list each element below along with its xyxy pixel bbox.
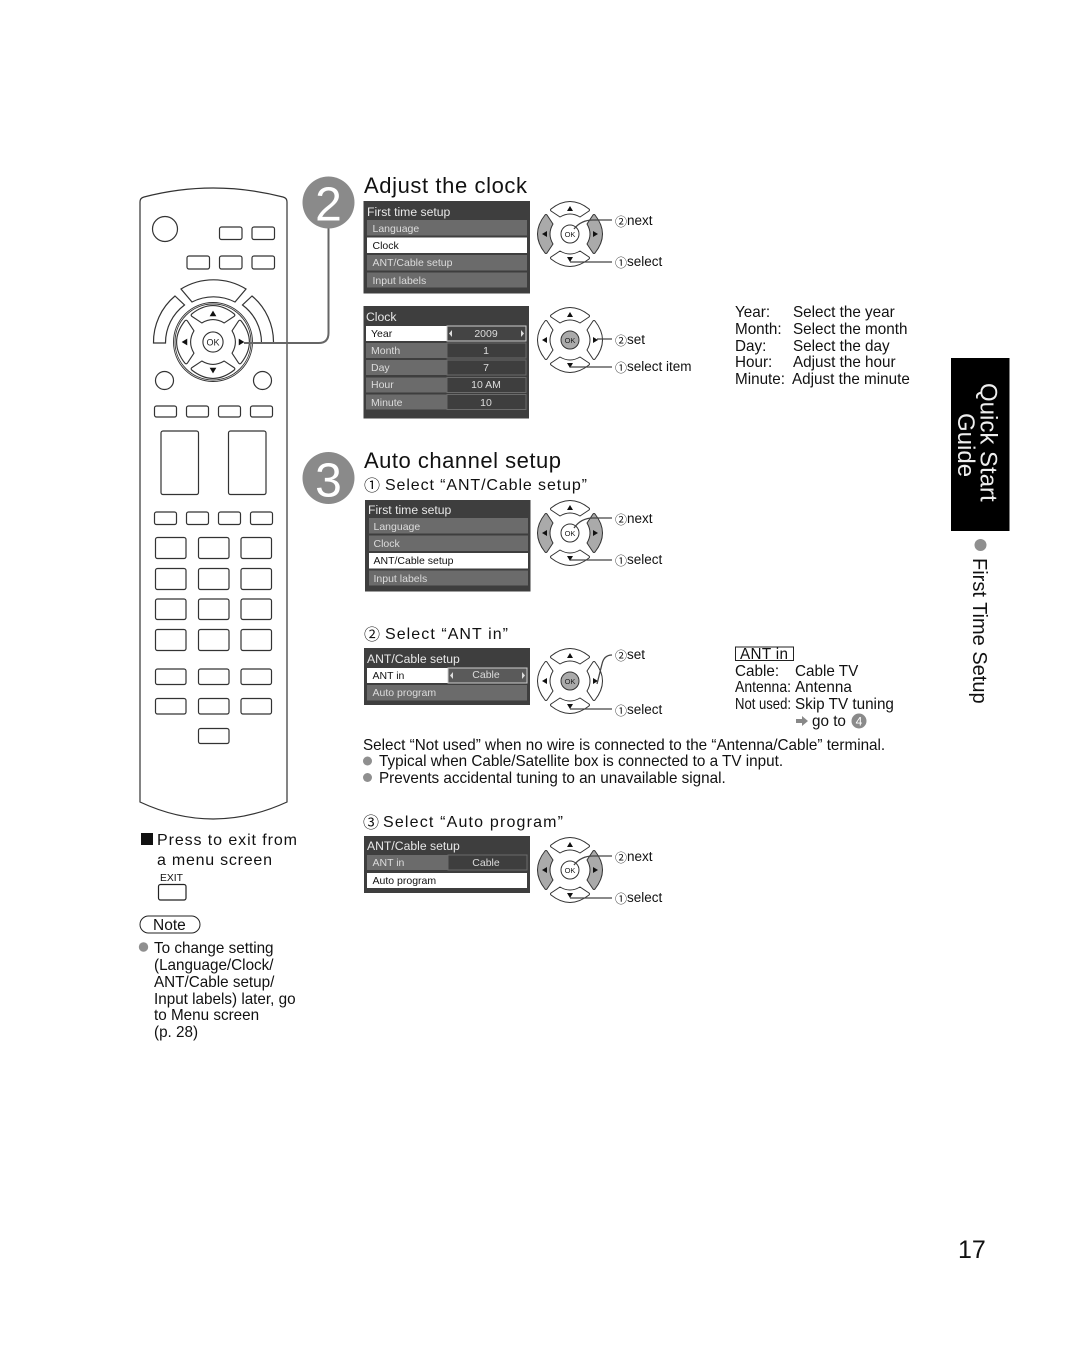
clock field descriptions: Select the year bbox=[793, 304, 895, 321]
menu: first time setup, clock selected: ANT/Cable setup bbox=[372, 257, 453, 269]
remote buttons: set / select item: ① bbox=[615, 359, 627, 376]
clock field descriptions: Select the month bbox=[793, 321, 907, 338]
menu: clock: Clock bbox=[366, 310, 397, 324]
remote control: OK bbox=[206, 338, 220, 348]
sub-heading: select ANT in: ② bbox=[364, 621, 380, 645]
remote buttons: next / select bbox=[538, 838, 663, 907]
menu: first time setup, clock selected: Input labels bbox=[372, 275, 426, 287]
note text: to Menu screen bbox=[154, 1007, 259, 1024]
ANT in options: Skip TV tuning bbox=[795, 696, 894, 713]
ANT in options: Antenna: bbox=[735, 679, 791, 696]
menu: first time setup, ANT/Cable selected: Input labels bbox=[374, 573, 427, 585]
remote buttons: set / select item: set bbox=[627, 332, 645, 347]
menu: clock: Day bbox=[371, 362, 390, 374]
clock field descriptions: Minute: bbox=[735, 371, 785, 388]
menu: first time setup, ANT/Cable selected bbox=[365, 500, 530, 592]
menu: auto program selected: Auto program bbox=[372, 875, 436, 887]
not used explanation: Select “Not used” when no wire is connected to the “Antenna/Cable” terminal. bbox=[363, 737, 885, 754]
menu: first time setup, clock selected: Clock bbox=[372, 240, 400, 252]
clock field descriptions: Select the day bbox=[793, 338, 890, 355]
sub-heading: select auto program: Select “Auto program” bbox=[383, 814, 563, 831]
ANT in options: Antenna bbox=[795, 679, 852, 696]
remote buttons: next / select: ② bbox=[615, 849, 627, 866]
remote buttons: set / select item: OK bbox=[565, 336, 575, 345]
remote buttons: set / select item bbox=[538, 308, 692, 376]
menu: ANT in selected: ANT in bbox=[372, 670, 405, 682]
remote buttons: next / select: next bbox=[627, 213, 653, 228]
remote buttons: next / select: ① bbox=[615, 890, 627, 907]
menu: clock: 7 bbox=[483, 362, 489, 374]
sub-heading: select ANT/Cable setup bbox=[364, 472, 587, 496]
remote buttons: set / select item: ② bbox=[615, 332, 627, 349]
menu: auto program selected bbox=[364, 836, 530, 893]
menu: auto program selected: Cable bbox=[472, 857, 500, 869]
note text bbox=[139, 940, 296, 1041]
icon: exit button: EXIT bbox=[160, 872, 184, 884]
clock field descriptions: Year: bbox=[735, 304, 770, 321]
note label: Note bbox=[153, 917, 186, 934]
clock field descriptions: Adjust the hour bbox=[793, 354, 896, 371]
ANT in options: Not used: bbox=[735, 696, 791, 713]
remote buttons: next / select: select bbox=[627, 254, 663, 269]
remote buttons: set / select: ② bbox=[615, 647, 627, 664]
menu: clock: 2009 bbox=[474, 328, 498, 340]
step 2 badge: 2 bbox=[315, 178, 342, 232]
note text: To change setting bbox=[154, 940, 274, 957]
ANT in options: go to bbox=[812, 713, 846, 730]
press to exit instruction: Press to exit from bbox=[157, 832, 297, 849]
ANT in options: ANT in bbox=[740, 646, 788, 663]
heading: auto channel setup: Auto channel setup bbox=[364, 448, 561, 473]
side tab: quick start guide: Quick Start bbox=[974, 383, 1002, 502]
not used explanation: Prevents accidental tuning to an unavailable signal. bbox=[379, 770, 726, 787]
remote buttons: next / select: ① bbox=[615, 552, 627, 569]
menu: ANT in selected bbox=[364, 648, 530, 705]
clock field descriptions: Month: bbox=[735, 321, 782, 338]
menu: clock: 10 AM bbox=[471, 379, 501, 391]
menu: first time setup, clock selected bbox=[364, 201, 530, 294]
page number: 17 bbox=[958, 1236, 986, 1264]
remote buttons: next / select: ② bbox=[615, 213, 627, 230]
menu: first time setup, ANT/Cable selected: Language bbox=[374, 521, 420, 533]
sub-heading: select ANT/Cable setup: Select “ANT/Cable setup” bbox=[385, 477, 587, 494]
remote buttons: set / select item: select item bbox=[627, 359, 692, 374]
arrow: step 2 connector to remote bbox=[244, 226, 328, 343]
menu: clock: Year bbox=[371, 328, 393, 340]
menu: first time setup, ANT/Cable selected: First time setup bbox=[368, 503, 452, 517]
menu: clock: 10 bbox=[480, 397, 492, 409]
sub-heading: select ANT in bbox=[364, 621, 508, 645]
ANT in options: 4 bbox=[856, 714, 863, 728]
menu: first time setup, clock selected: First time setup bbox=[367, 205, 451, 219]
menu: auto program selected: ANT/Cable setup bbox=[367, 839, 460, 853]
sub-heading: select ANT/Cable setup: ① bbox=[364, 472, 380, 496]
menu: first time setup, ANT/Cable selected: Clock bbox=[374, 538, 401, 550]
clock field descriptions: Hour: bbox=[735, 354, 772, 371]
menu: first time setup, ANT/Cable selected: ANT/Cable setup bbox=[374, 555, 454, 567]
clock field descriptions: Day: bbox=[735, 338, 766, 355]
remote buttons: next / select: ① bbox=[615, 254, 627, 271]
press to exit instruction: a menu screen bbox=[157, 852, 272, 869]
remote buttons: next / select: OK bbox=[565, 230, 575, 239]
menu: ANT in selected: Cable bbox=[472, 669, 500, 681]
remote buttons: next / select: next bbox=[627, 849, 653, 864]
sub-heading: select auto program bbox=[363, 809, 563, 833]
menu: first time setup, clock selected: Language bbox=[372, 223, 419, 235]
ANT in options: Cable TV bbox=[795, 663, 859, 680]
remote buttons: next / select: ② bbox=[615, 511, 627, 528]
note text: (p. 28) bbox=[154, 1024, 198, 1041]
remote buttons: set / select bbox=[538, 647, 663, 719]
step 2 badge bbox=[302, 176, 354, 232]
menu: clock: Hour bbox=[371, 379, 394, 391]
not used explanation: Typical when Cable/Satellite box is connected to a TV input. bbox=[379, 753, 783, 770]
remote buttons: next / select bbox=[538, 202, 663, 271]
remote buttons: set / select: ① bbox=[615, 702, 627, 719]
sub-heading: select ANT in: Select “ANT in” bbox=[385, 626, 508, 643]
note text: (Language/Clock/ bbox=[154, 957, 274, 974]
ANT in options bbox=[735, 646, 894, 730]
icon: exit button bbox=[158, 872, 186, 900]
menu: ANT in selected: ANT/Cable setup bbox=[367, 652, 460, 666]
clock field descriptions bbox=[735, 304, 910, 388]
ANT in options: Cable: bbox=[735, 663, 779, 680]
remote buttons: next / select bbox=[538, 500, 663, 569]
note text: Input labels) later, go bbox=[154, 991, 296, 1008]
remote buttons: set / select: OK bbox=[565, 677, 575, 686]
remote buttons: next / select: next bbox=[627, 511, 653, 526]
menu: clock bbox=[364, 306, 529, 418]
step 3 badge bbox=[302, 452, 354, 508]
menu: ANT in selected: Auto program bbox=[372, 687, 436, 699]
side tab: quick start guide bbox=[951, 358, 1010, 531]
sub-heading: select auto program: ③ bbox=[363, 809, 379, 833]
menu: clock: Minute bbox=[371, 397, 403, 409]
clock field descriptions: Adjust the minute bbox=[792, 371, 910, 388]
menu: clock: 1 bbox=[483, 345, 489, 357]
note text: ANT/Cable setup/ bbox=[154, 974, 275, 991]
remote buttons: set / select: select bbox=[627, 702, 663, 717]
remote buttons: next / select: OK bbox=[565, 866, 575, 875]
side label: first time setup: First Time Setup bbox=[968, 558, 990, 704]
remote buttons: next / select: select bbox=[627, 890, 663, 905]
remote control bbox=[140, 188, 287, 819]
press to exit instruction bbox=[141, 832, 297, 869]
not used explanation bbox=[363, 737, 885, 787]
menu: auto program selected: ANT in bbox=[372, 857, 405, 869]
remote buttons: next / select: select bbox=[627, 552, 663, 567]
remote buttons: set / select: set bbox=[627, 647, 645, 662]
step 3 badge: 3 bbox=[315, 454, 342, 508]
heading: adjust the clock: Adjust the clock bbox=[364, 173, 528, 198]
note label bbox=[140, 916, 200, 934]
remote buttons: next / select: OK bbox=[565, 529, 575, 538]
menu: clock: Month bbox=[371, 345, 400, 357]
side tab: quick start guide: Guide bbox=[952, 413, 979, 477]
